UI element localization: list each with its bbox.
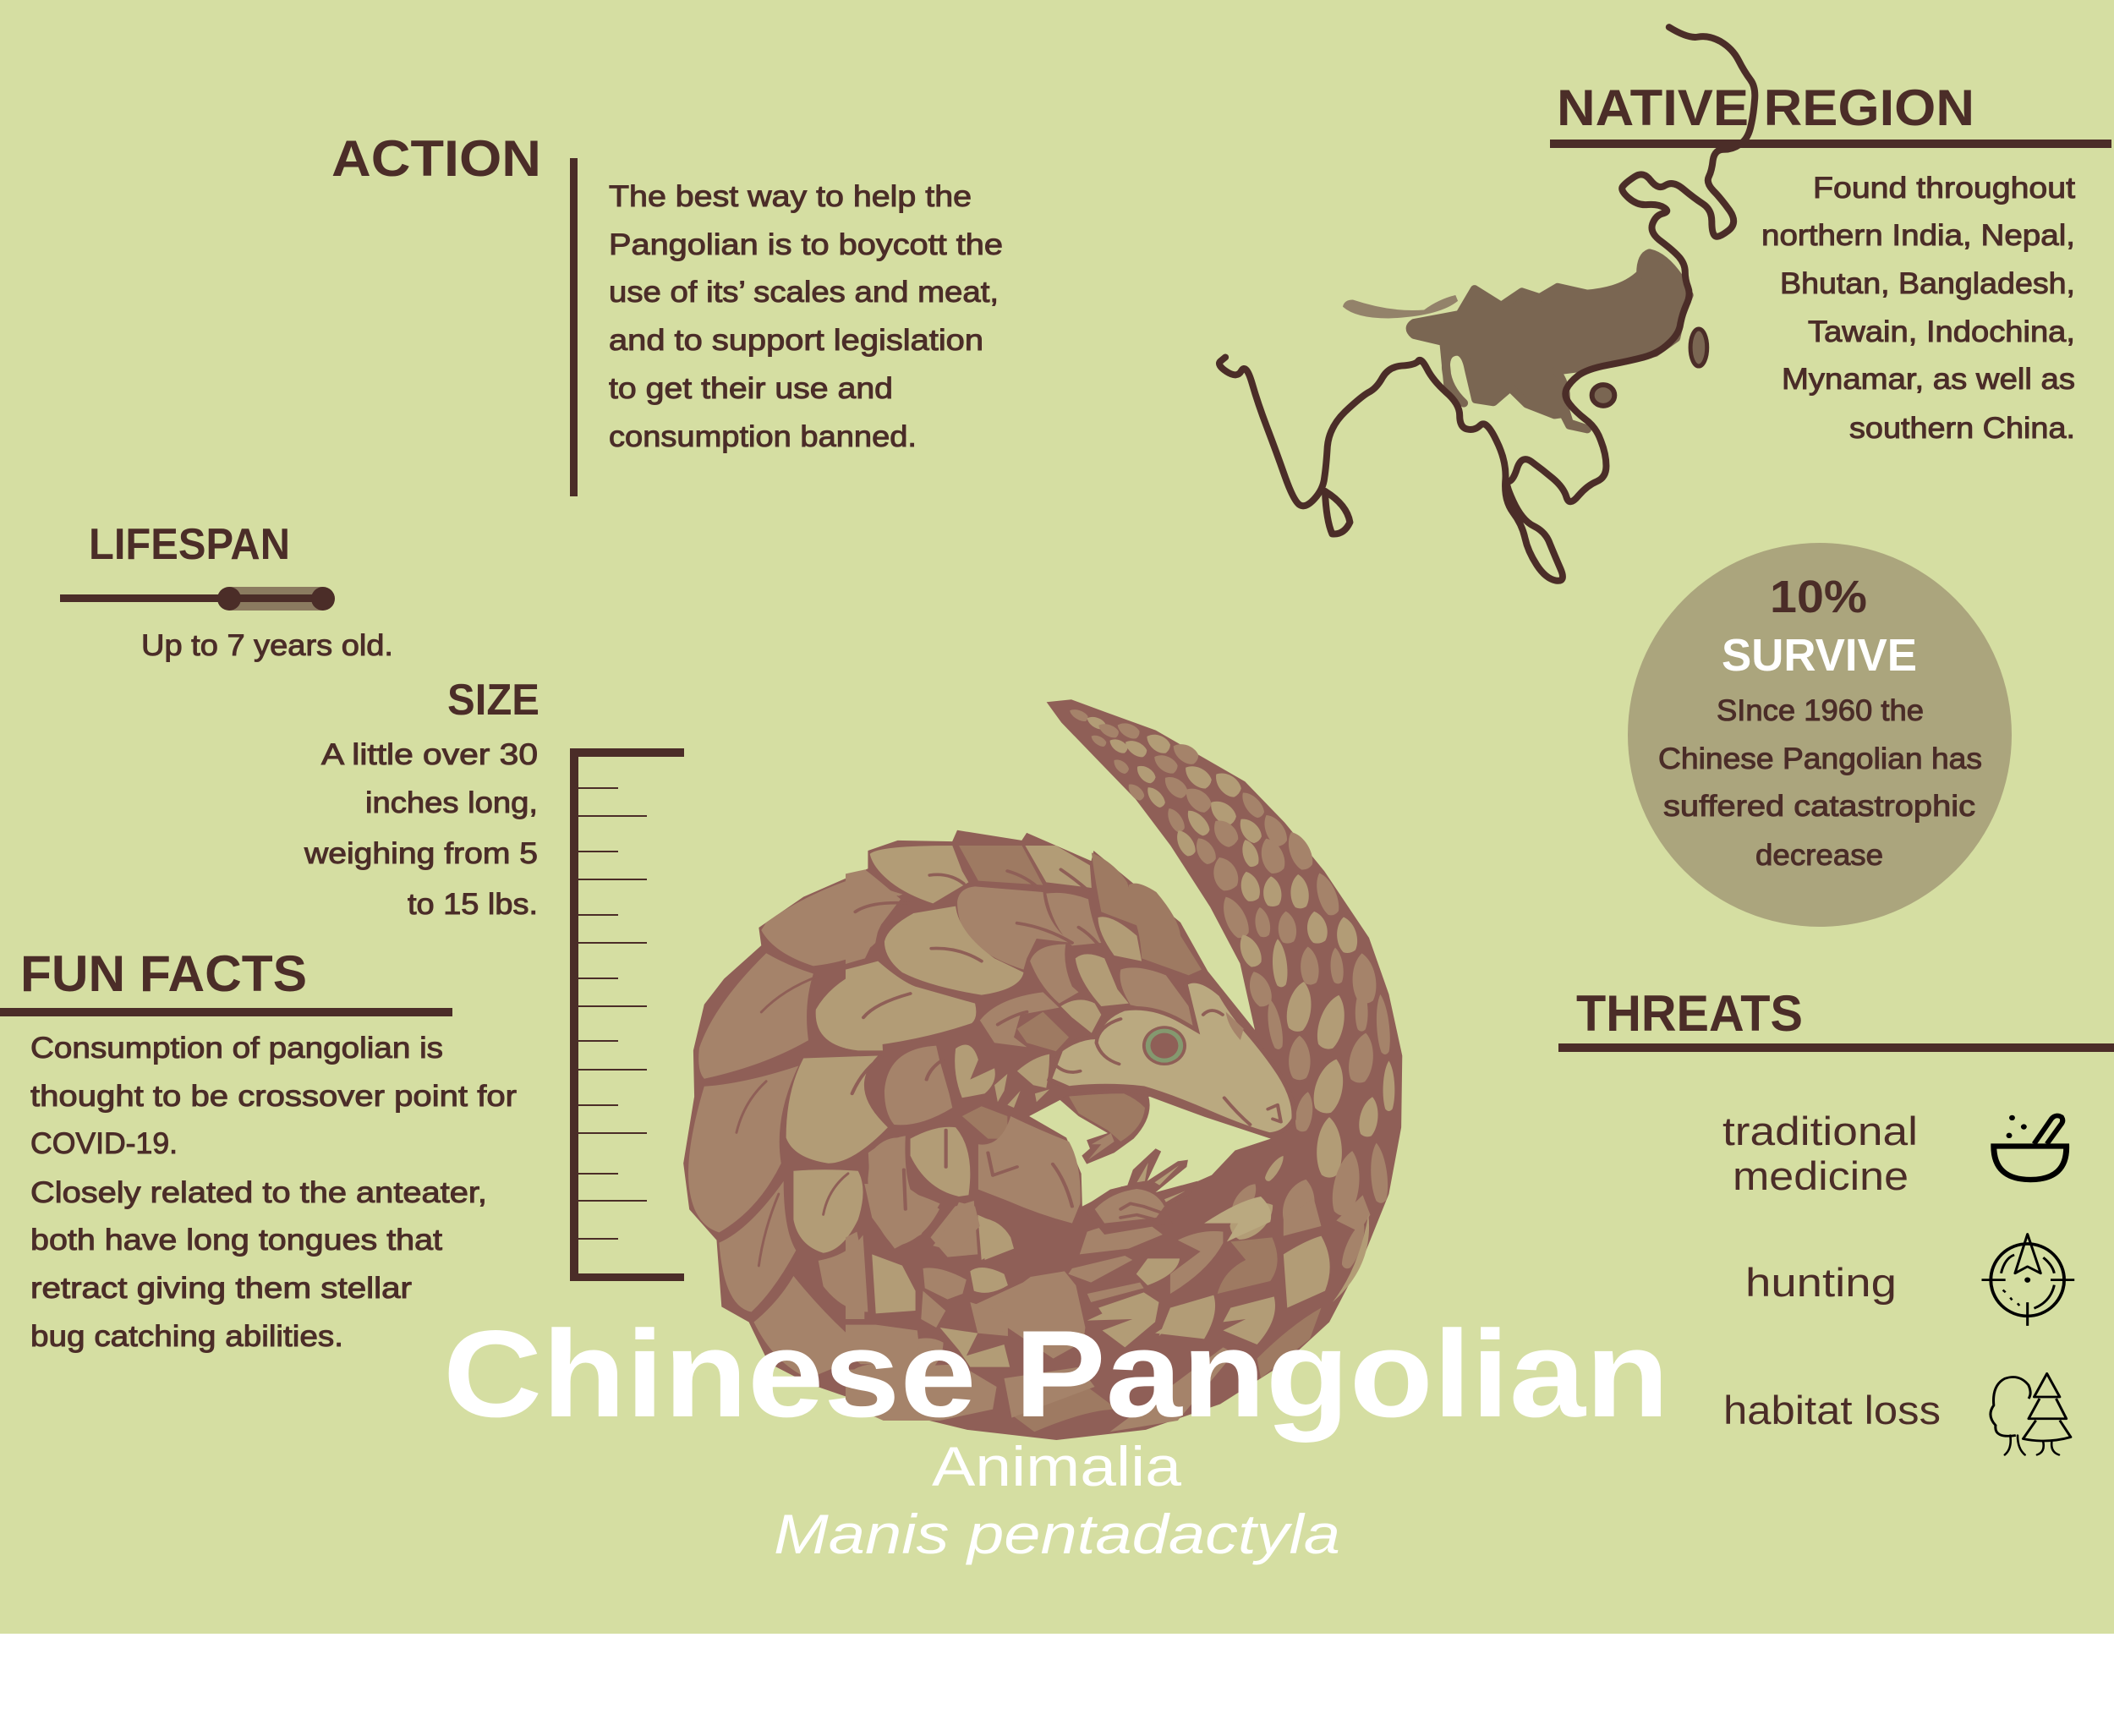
fun facts text: COVID-19. [30,1127,178,1160]
native region rule [1550,140,2111,148]
subtitle: species name: Manis pentadactyla [774,1503,1340,1565]
crest scale [1226,1012,1244,1040]
callout: text: Chinese Pangolian has [1658,742,1982,775]
map: Hainan [1592,385,1614,406]
action text [609,180,1003,453]
action text: The best way to help the [609,180,972,213]
upper crack lines [852,869,1098,1209]
native region text: Bhutan, Bangladesh, [1780,267,2075,300]
threats heading: THREATS [1576,985,1803,1042]
threat: traditional medicine: traditional [1722,1109,1918,1153]
icon: crosshair target [1981,1234,2074,1326]
map: Taiwan [1690,329,1707,366]
callout: survive: SURVIVE [1722,630,1917,681]
fun facts text: Consumption of pangolian is [30,1032,443,1065]
action heading: ACTION [331,130,541,187]
action text: and to support legislation [609,324,983,357]
left crack lines [737,897,898,1266]
pangolin lower body scales [846,1184,1370,1432]
pangolin base layer [683,699,1402,1440]
upper scales [846,846,1202,1260]
left body scales [688,873,902,1378]
size text: inches long, [365,786,538,819]
title: Chinese Pangolian [443,1305,1669,1443]
size text: to 15 lbs. [408,888,538,921]
fun facts heading: FUN FACTS [20,945,307,1002]
action text: consumption banned. [609,420,917,453]
pangolin illustration [683,699,1402,1440]
fun facts text: retract giving them stellar [30,1272,412,1305]
action divider bar [570,158,578,496]
callout: text: suffered catastrophic [1663,790,1975,823]
action text: use of its’ scales and meat, [609,276,999,309]
native region text [1761,172,2075,445]
subtitle: kingdom: Animalia [932,1435,1181,1498]
section: threats [1558,985,2114,1454]
callout: text: SInce 1960 the [1717,694,1924,727]
front arm [1060,1089,1150,1164]
threat: hunting: hunting [1745,1260,1897,1305]
native region text: southern China. [1849,412,2075,445]
fun facts text [30,1032,517,1353]
threats rule [1558,1043,2114,1052]
ruler [570,748,684,1281]
threat: traditional medicine: medicine [1733,1153,1909,1198]
size text [304,738,538,921]
lifespan slider [60,587,335,611]
size text: weighing from 5 [304,837,538,870]
native region text: Mynamar, as well as [1782,363,2075,396]
pangolin silhouette [683,699,1402,1440]
callout: text [1658,694,1982,872]
map: western range strip [1343,295,1458,319]
lifespan text: Up to 7 years old. [141,629,393,662]
size heading: SIZE [447,676,539,725]
map: shaded range [1410,253,1690,429]
tail and back scales [841,706,1394,1400]
native region heading: NATIVE REGION [1557,79,1974,136]
callout: text: decrease [1755,839,1883,872]
native region text: Tawain, Indochina, [1808,315,2075,348]
callout: percent: 10% [1770,572,1867,622]
gap under head [1029,1097,1271,1207]
action text: Pangolian is to boycott the [609,228,1003,261]
face marks [1054,1010,1281,1125]
head [1049,981,1294,1135]
fun facts text: thought to be crossover point for [30,1080,517,1113]
section: action [331,130,1003,496]
fun facts text: both have long tongues that [30,1224,442,1257]
section: lifespan [60,520,393,662]
fun facts text: bug catching abilities. [30,1320,343,1353]
threat: habitat loss: habitat loss [1723,1388,1941,1432]
eye [1142,1026,1186,1065]
map: Sri Lanka [1325,491,1350,534]
lifespan heading: LIFESPAN [89,520,290,569]
icon: mortar and pestle [1994,1115,2067,1180]
back foot [1082,1148,1197,1235]
native region text: Found throughout [1813,172,2075,205]
fun facts text: Closely related to the anteater, [30,1176,487,1209]
section: native region [1550,79,2111,445]
section: size [304,676,684,1281]
icon: trees [1991,1373,2071,1454]
fun facts rule [0,1008,452,1016]
action text: to get their use and [609,372,893,405]
section: fun facts [0,945,517,1353]
map: coastline [1219,27,1755,581]
map: native region of Asia [1219,27,1755,581]
threat: traditional medicine [1722,1109,1918,1198]
native region text: northern India, Nepal, [1761,219,2075,252]
callout: 10% survive [1628,543,2012,927]
pangolin head and upper body [846,846,1294,1260]
size text: A little over 30 [321,738,538,771]
